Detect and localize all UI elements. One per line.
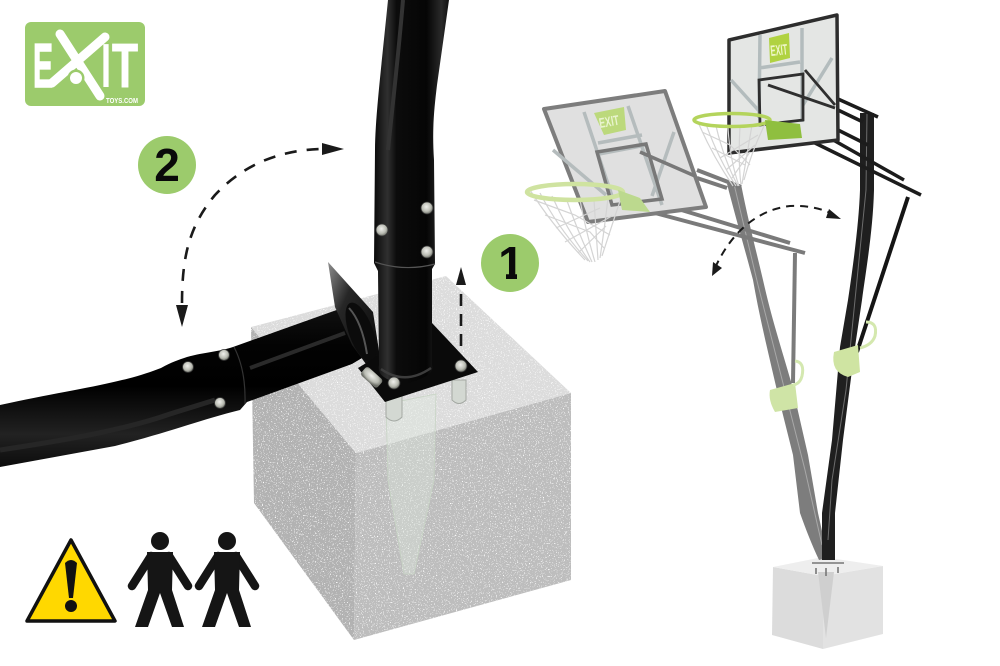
flange <box>339 299 383 365</box>
step badge 2: 2 <box>154 139 180 191</box>
upright hoop: EXIT <box>770 41 788 60</box>
bracket plate <box>328 262 385 390</box>
two-person icon: second person <box>199 532 255 627</box>
rim <box>694 114 770 126</box>
pole bolts <box>182 350 230 408</box>
ghost clamp <box>770 383 798 412</box>
vertical raised pole <box>374 0 467 389</box>
step badge 1: 1 <box>498 237 524 289</box>
green clamp <box>833 345 860 377</box>
arrow: lift up, dashed <box>456 267 466 346</box>
logo: EXIT toys: I <box>101 32 111 101</box>
support arms <box>815 99 921 195</box>
step badge 1 <box>481 234 539 292</box>
logo: EXIT toys: TOYS.COM <box>106 98 138 105</box>
ghost backboard <box>544 91 706 222</box>
hinge bracket and base plate <box>328 262 478 402</box>
logo: EXIT toys: X <box>61 32 83 101</box>
logo: EXIT toys <box>25 22 145 106</box>
small concrete block <box>772 557 883 649</box>
backboard <box>729 15 838 153</box>
dashed arrow: tilt motion <box>712 206 841 276</box>
block faces <box>251 276 571 640</box>
anchor pins <box>386 380 466 421</box>
polystyrene concrete block, large <box>251 276 571 640</box>
warning triangle <box>27 540 115 621</box>
step badge 2 <box>138 136 196 194</box>
main pole <box>822 113 874 560</box>
ghost arms <box>655 170 805 253</box>
arrow: rotate pole, curved dashed <box>176 143 344 327</box>
lowered hoop ghost: EXIT <box>598 112 620 131</box>
logo: EXIT toys: E <box>33 32 53 101</box>
diagonal strut <box>857 197 908 352</box>
lowered hoop ghost <box>527 91 828 560</box>
ground spike inside block <box>386 394 436 574</box>
upright hoop <box>694 15 921 560</box>
ghost hoop net <box>530 190 622 262</box>
ghost rim <box>527 184 623 200</box>
hinge bolt <box>360 366 384 389</box>
ghost strut <box>793 253 795 383</box>
two-person icon: first person <box>132 532 188 627</box>
base plate <box>358 323 478 402</box>
ghost pole <box>727 184 828 560</box>
horizontal lowered pole <box>0 305 362 467</box>
pole bolts <box>376 202 467 389</box>
logo: EXIT toys: T <box>112 32 138 101</box>
hoop net <box>698 122 766 186</box>
